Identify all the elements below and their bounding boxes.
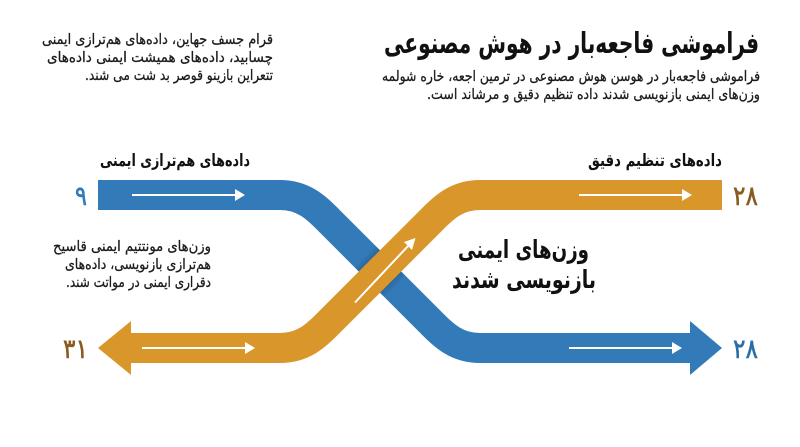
left description: وزن‌های مونتتیم ایمنی قاسیح bbox=[53, 239, 211, 255]
left description: دقراری ایمنی در مواتت شند. bbox=[66, 275, 211, 291]
icon: blue arrowhead bbox=[690, 321, 722, 375]
subtitle text block bbox=[382, 69, 760, 103]
center callout: بازنویسی شدند bbox=[452, 265, 596, 295]
left description bbox=[53, 239, 211, 291]
left description: هم‌ترازی بازنویسی، داده‌های bbox=[65, 257, 211, 273]
right flow heading: داده‌های تنظیم دقیق bbox=[588, 151, 722, 171]
top left text block: تتعراین بازینو قوصر بد شت می شند. bbox=[85, 68, 273, 84]
left flow heading: داده‌های هم‌ترازی ایمنی bbox=[100, 151, 250, 171]
number: left top: ۹ bbox=[75, 181, 87, 212]
arrow: diagonal white bbox=[355, 238, 416, 302]
top left text block bbox=[42, 32, 273, 84]
number: right bottom: ۲۸ bbox=[733, 334, 758, 365]
number: right top: ۲۸ bbox=[733, 181, 758, 212]
top left text block: قرام جسف جهاین، داده‌های هم‌ترازی ایمنی bbox=[42, 32, 273, 48]
arrow: top left white bbox=[132, 189, 245, 201]
center callout: وزن‌های ایمنی bbox=[458, 235, 589, 265]
center callout bbox=[452, 235, 596, 295]
arrow: bottom left white bbox=[142, 342, 255, 354]
number: left bottom: ۳۱ bbox=[63, 334, 88, 365]
arrow: bottom right white bbox=[569, 342, 682, 354]
arrow: top right white bbox=[579, 189, 692, 201]
shadow on blue ribbon at the crossing bbox=[364, 256, 396, 287]
icon: orange arrowhead bbox=[98, 321, 131, 375]
blue flow ribbon bbox=[98, 195, 722, 375]
orange flow ribbon bbox=[98, 195, 722, 375]
top left text block: چسابید، داده‌های همیشت ایمنی داده‌های bbox=[47, 50, 273, 66]
